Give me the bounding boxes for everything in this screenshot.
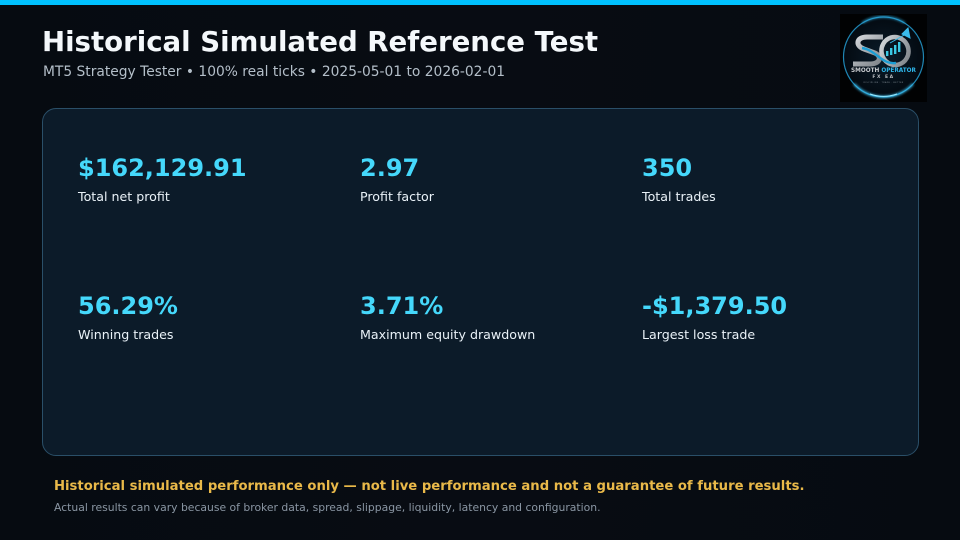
metric: maximum equity drawdown xyxy=(360,292,535,342)
icon: Smooth Operator FX EA logo: SMOOTH OPERATOR xyxy=(851,67,916,74)
icon: Smooth Operator FX EA logo xyxy=(840,14,927,102)
metric: profit factor: 2.97 xyxy=(360,154,419,182)
subtitle: MT5 Strategy Tester • 100% real ticks • 2025-05-01 to 2026-02-01 xyxy=(43,64,505,80)
metric: largest loss trade: -$1,379.50 xyxy=(642,292,787,320)
disclaimer note: Actual results can vary because of broker data, spread, slippage, liquidity, latency and configuration. xyxy=(54,500,600,514)
metric: total trades: 350 xyxy=(642,154,692,182)
top accent bar xyxy=(0,0,960,5)
metric: winning trades xyxy=(78,292,178,342)
metric: maximum equity drawdown: Maximum equity drawdown xyxy=(360,327,535,342)
metric: total net profit: $162,129.91 xyxy=(78,154,247,182)
metric: total net profit xyxy=(78,154,247,204)
metric: total trades xyxy=(642,154,716,204)
metric: profit factor xyxy=(360,154,434,204)
metric: winning trades: Winning trades xyxy=(78,327,174,342)
icon: Smooth Operator FX EA logo: FX EA xyxy=(872,74,895,80)
title: Historical Simulated Reference Test xyxy=(42,25,598,58)
metric: total trades: Total trades xyxy=(642,189,716,204)
disclaimer heading: Historical simulated performance only — not live performance and not a guarantee of future results. xyxy=(54,479,804,494)
metric: total net profit: Total net profit xyxy=(78,189,170,204)
metric: largest loss trade xyxy=(642,292,787,342)
metric: winning trades: 56.29% xyxy=(78,292,178,320)
panel: metrics xyxy=(42,108,919,456)
icon: Smooth Operator FX EA logo: DISCIPLINE · TRADE · BETTER xyxy=(863,81,904,84)
metric: profit factor: Profit factor xyxy=(360,189,434,204)
metric: largest loss trade: Largest loss trade xyxy=(642,327,755,342)
metric: maximum equity drawdown: 3.71% xyxy=(360,292,443,320)
